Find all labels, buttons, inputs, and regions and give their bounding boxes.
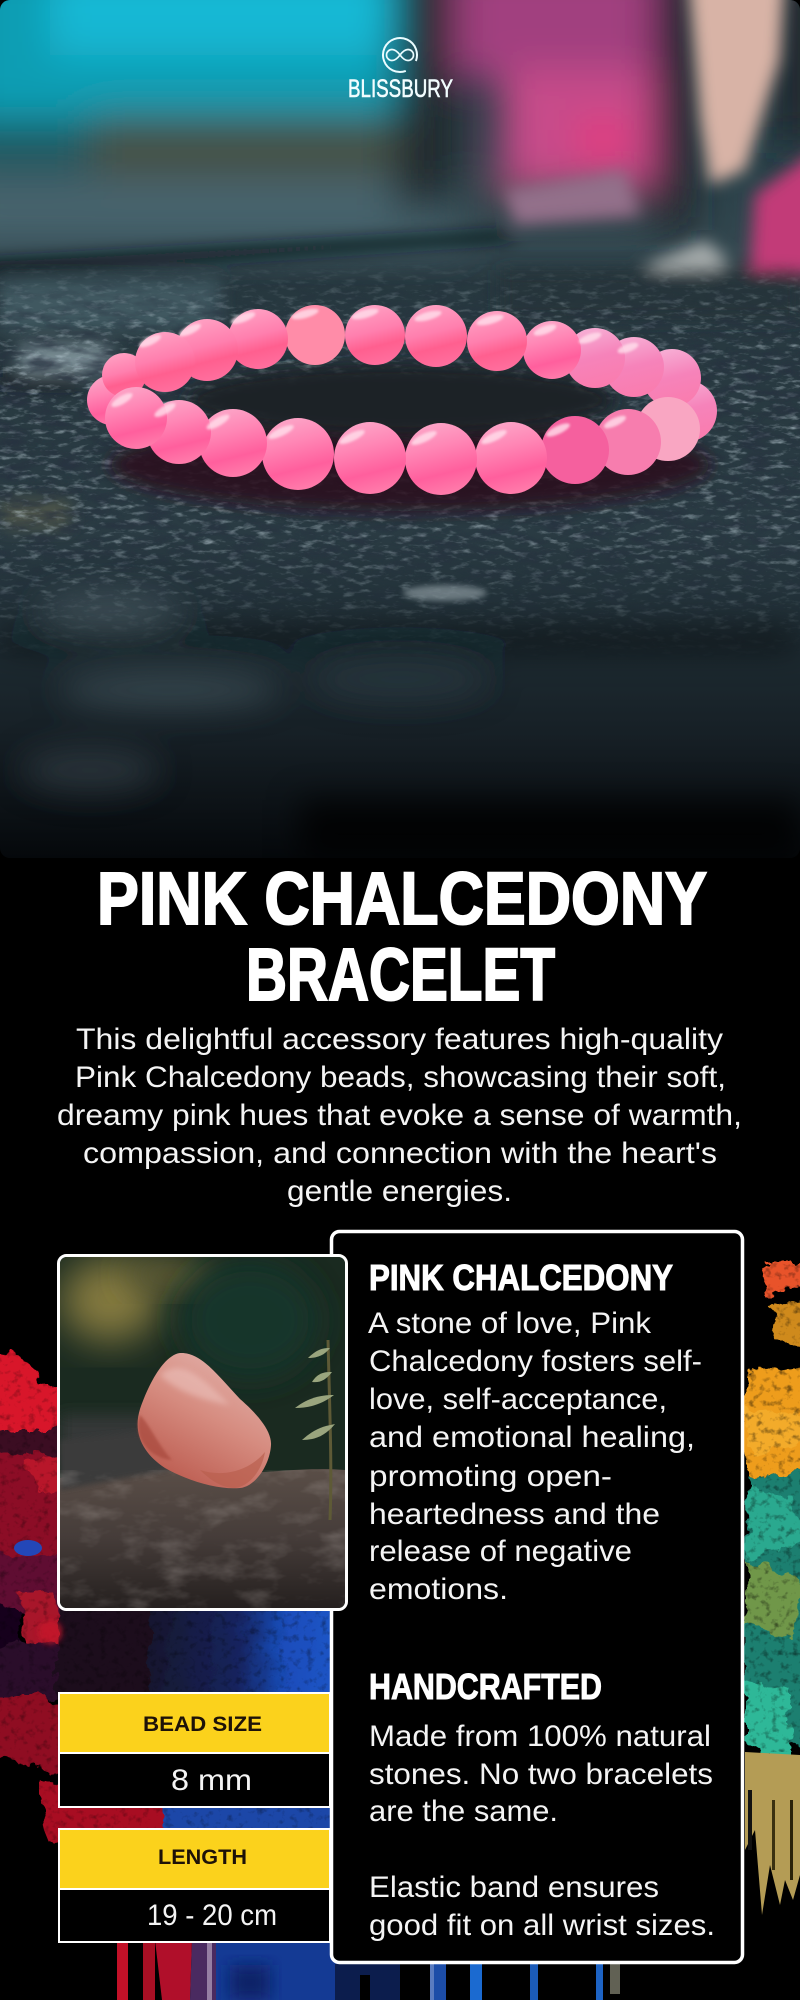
intro paragraph: compassion, and connection with the heart's [83, 1137, 717, 1170]
text: handcrafted details: Made from 100% natural [369, 1720, 711, 1753]
text: stone meaning: love, self-acceptance, [369, 1383, 667, 1416]
spec table: bead size: BEAD SIZE [143, 1713, 262, 1736]
text: handcrafted details: are the same. [369, 1795, 558, 1828]
spec table: length [59, 1829, 330, 1942]
text: stone meaning: heartedness and the [369, 1498, 660, 1531]
text: handcrafted details: good fit on all wrist sizes. [369, 1909, 715, 1942]
spec table: bead size: 8 mm [171, 1764, 252, 1797]
intro paragraph: gentle energies. [287, 1175, 512, 1208]
spec table: length: 19 - 20 cm [147, 1899, 277, 1932]
brand logo [349, 37, 453, 98]
text: stone meaning: and emotional healing, [369, 1421, 695, 1454]
bottom paint drips under panel [335, 1964, 620, 2000]
hero photo: pink bracelet on dark stone [0, 0, 800, 860]
photo: raw pink chalcedony stone [58, 1256, 346, 1610]
bottom paint drips [117, 1940, 128, 2000]
intro paragraph: This delightful accessory features high-quality [76, 1023, 723, 1056]
intro paragraph: dreamy pink hues that evoke a sense of warmth, [57, 1099, 742, 1132]
text: handcrafted details: stones. No two bracelets [369, 1758, 713, 1791]
title [97, 857, 707, 1016]
panel: stone description [332, 1232, 742, 1962]
bracelet beads [87, 305, 717, 495]
spec table: bead size [59, 1693, 330, 1807]
text: stone meaning: A stone of love, Pink [368, 1307, 652, 1340]
intro paragraph: Pink Chalcedony beads, showcasing their soft, [75, 1061, 726, 1094]
text: handcrafted details: Elastic band ensures [369, 1871, 659, 1904]
text: handcrafted details [369, 1720, 715, 1942]
texture on wet stone [0, 260, 800, 660]
decorative paint splash: right [745, 1262, 800, 1915]
heading: pink chalcedony: PINK CHALCEDONY [369, 1257, 673, 1298]
text: stone meaning: Chalcedony fosters self- [369, 1345, 702, 1378]
heading: handcrafted: HANDCRAFTED [369, 1666, 602, 1707]
text: stone meaning [368, 1307, 702, 1606]
spec table: length: LENGTH [158, 1846, 247, 1869]
title: BRACELET [246, 933, 555, 1016]
text: stone meaning: release of negative [369, 1535, 632, 1568]
title: PINK CHALCEDONY [97, 857, 707, 940]
intro paragraph [57, 1023, 742, 1208]
decorative paint splash: left and bottom [0, 1350, 345, 2000]
text: stone meaning: promoting open- [369, 1460, 612, 1493]
bracelet shadow [110, 419, 710, 511]
text: stone meaning: emotions. [369, 1573, 508, 1606]
brand logo: BLISSBURY [348, 75, 453, 103]
